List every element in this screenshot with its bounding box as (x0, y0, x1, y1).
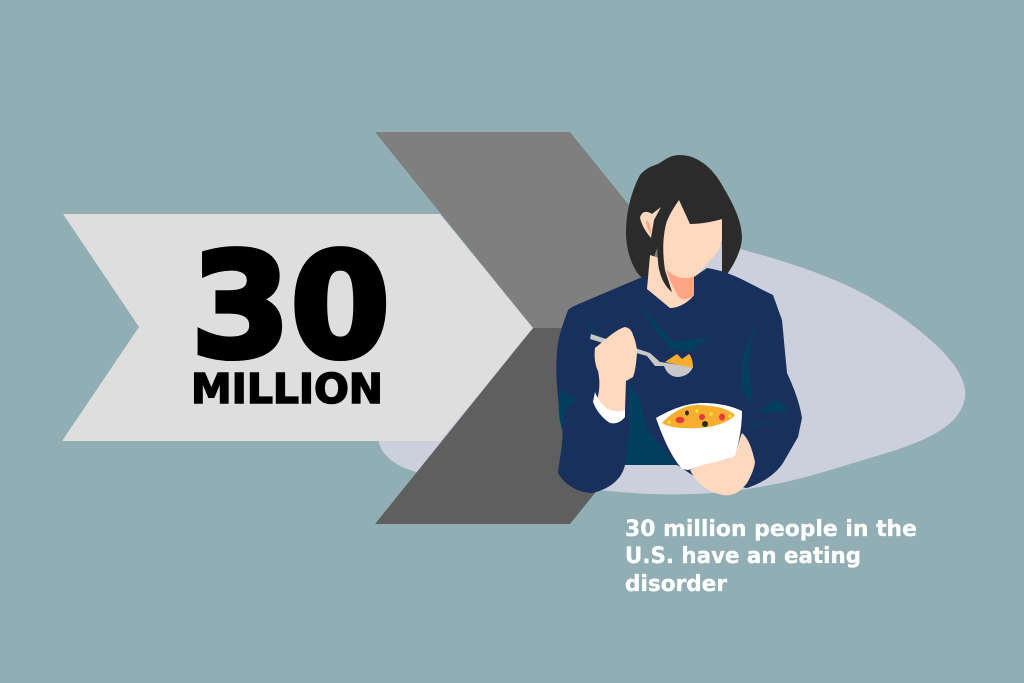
big number: 30 (191, 222, 390, 390)
bowl food (662, 405, 735, 428)
million label: MILLION (191, 365, 383, 413)
hair strand (657, 200, 679, 292)
caption (625, 517, 917, 597)
hand holding bowl (690, 433, 755, 495)
hand holding spoon (595, 327, 637, 415)
ear (640, 207, 661, 238)
light arrow banner (62, 214, 533, 441)
woman eating illustration (556, 155, 802, 495)
chevron: upper dark band (375, 132, 728, 328)
bowl (656, 403, 742, 470)
neck shadow (666, 268, 694, 299)
lavender blob (378, 240, 965, 494)
shirt cuff (593, 392, 625, 423)
caption: U.S. have an eating (625, 544, 861, 569)
neck (647, 255, 694, 308)
spoon food (665, 354, 693, 368)
spoon (590, 334, 693, 377)
hair back (626, 155, 742, 282)
chevron: lower dark band (375, 328, 728, 524)
caption: disorder (625, 572, 727, 597)
sweater (556, 268, 802, 493)
inner ear (646, 220, 651, 234)
face (662, 200, 722, 278)
sweater shadows (559, 303, 790, 465)
caption: 30 million people in the (625, 517, 917, 542)
